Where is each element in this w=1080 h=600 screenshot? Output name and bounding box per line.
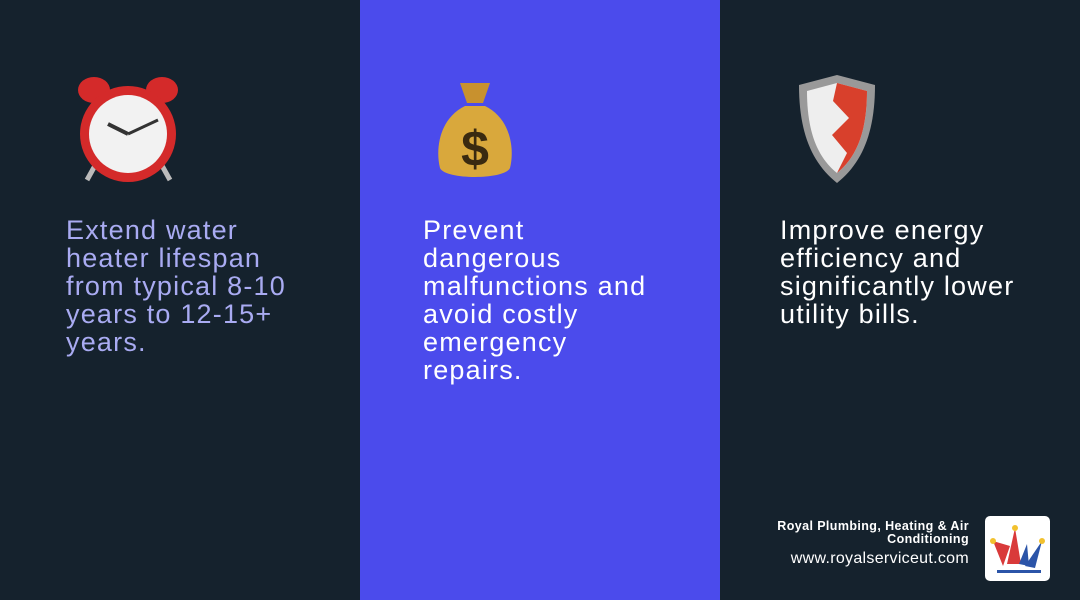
icon: shield: [799, 75, 875, 183]
icon: alarm clock: [78, 77, 178, 182]
text: safety: Prevent dangerous malfunctions and avoid costly emergency repairs.: [423, 215, 646, 385]
footer: company info: Royal Plumbing, Heating & Air Conditioning: [777, 519, 969, 546]
panel: efficiency: [720, 0, 1080, 600]
text: efficiency: Improve energy efficiency and significantly lower utility bills.: [780, 215, 1014, 329]
footer: company info: [777, 516, 1050, 581]
logo: [985, 516, 1050, 581]
panel: lifespan: [0, 0, 360, 600]
icon: money bag: $: [461, 121, 489, 177]
icon: money bag: [438, 83, 512, 177]
footer: company info: www.royalserviceut.com: [791, 550, 969, 567]
text: lifespan: Extend water heater lifespan from typical 8-10 years to 12-15+ years.: [66, 215, 286, 357]
panel: safety: [360, 0, 720, 600]
